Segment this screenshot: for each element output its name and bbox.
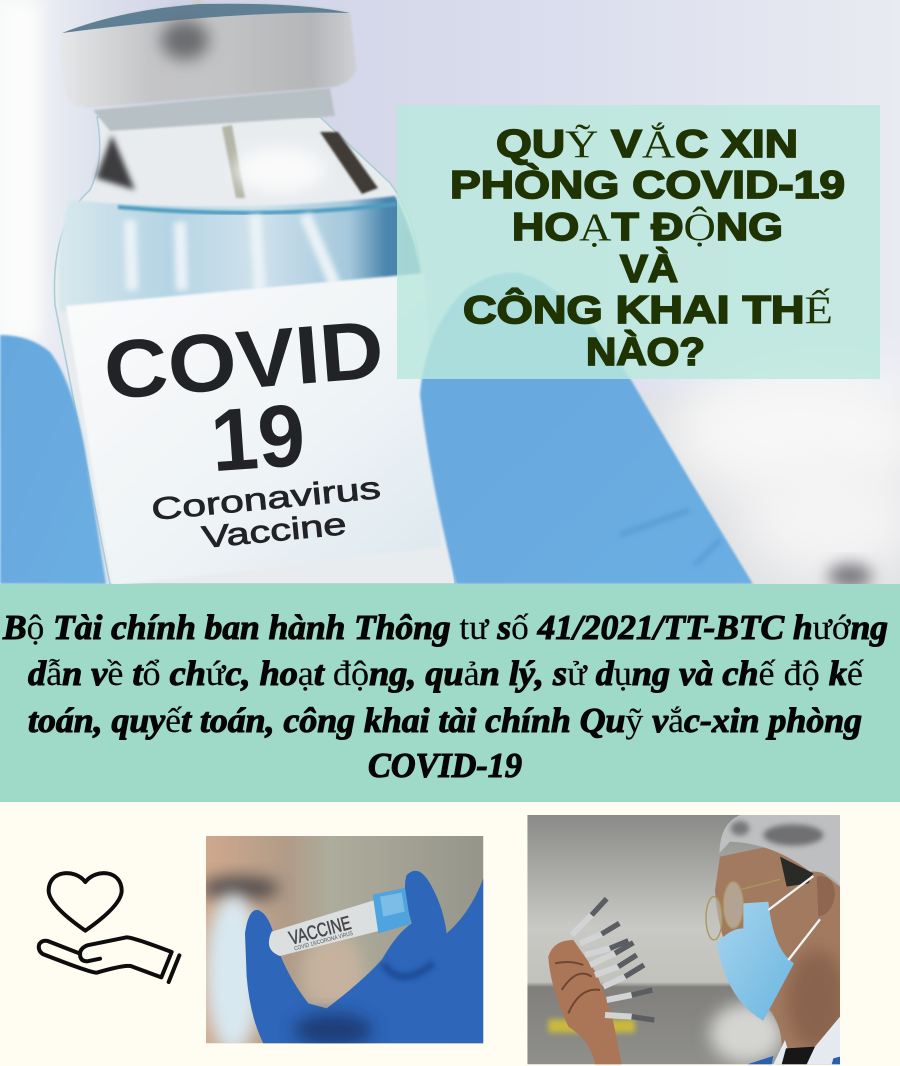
tube label subtitle: COVID 19/CORONA VIRUS <box>294 931 354 952</box>
mask <box>717 902 794 1021</box>
photo: gloved hand holding vaccine tube <box>200 836 483 1053</box>
description text: dẫn về tổ chức, hoạt động, quản lý, sử dụng và chế độ kế <box>28 654 865 693</box>
hero photo: COVID-19 vaccine vial held in blue gloves <box>0 0 900 615</box>
tube label VACCINE: VACCINE <box>287 913 354 950</box>
description band <box>0 584 900 802</box>
title text <box>450 121 845 374</box>
description text: toán, quyết toán, công khai tài chính Qu ỹ vắc-xin phòng <box>28 701 862 740</box>
neck ring <box>93 88 335 131</box>
photo: scientist in mask inspecting vials <box>527 815 847 1064</box>
title text: VÀ <box>620 247 678 291</box>
glasses <box>706 879 780 940</box>
label text: Vaccine: Vaccine <box>200 506 348 555</box>
description text: COVID-19 <box>368 746 522 785</box>
shirt collar <box>773 1017 840 1064</box>
description text <box>2 608 888 785</box>
vaccine liquid <box>59 196 422 312</box>
left glove finger <box>0 335 106 584</box>
glass vial body <box>54 117 455 584</box>
title text: QU Ỹ VẮC XIN <box>496 121 798 166</box>
vial label <box>66 273 441 586</box>
hairnet <box>719 815 840 885</box>
title text: NÀO? <box>586 330 705 374</box>
icon: heart in open hand <box>39 873 179 982</box>
label text: COVID: COVID <box>101 304 387 417</box>
vials fan <box>572 899 654 1020</box>
title text: HOẠT ĐỘNG <box>512 205 783 249</box>
title panel <box>397 105 880 379</box>
needle <box>192 0 204 4</box>
metal vial cap <box>61 4 357 108</box>
description text: Bộ Tài chính ban hành Thông tư số 41/2021/TT-BTC hướng <box>2 608 888 647</box>
vaccine tube <box>269 900 380 956</box>
label text: 19: 19 <box>208 385 308 490</box>
gloved hand <box>245 871 483 1043</box>
right glove finger <box>420 273 753 584</box>
title text: CÔNG KHAI TH Ế <box>463 287 833 332</box>
label text: Coronavirus: Coronavirus <box>150 470 382 527</box>
tube cap <box>373 888 411 933</box>
face and neck <box>715 843 840 1064</box>
title text: PHÒNG COVID-19 <box>450 163 845 207</box>
hand <box>548 940 622 1064</box>
